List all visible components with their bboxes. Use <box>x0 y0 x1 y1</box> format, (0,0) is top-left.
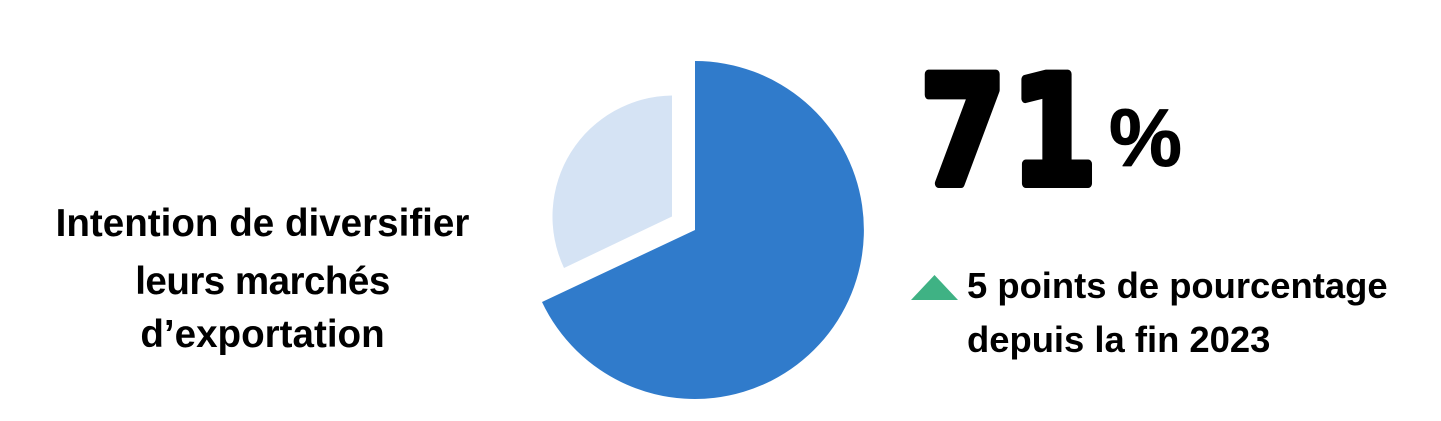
text: change note: depuis la fin 2023 <box>967 319 1270 360</box>
text: change note <box>967 265 1388 360</box>
text: change note: 5 points de pourcentage <box>967 265 1388 306</box>
text: indicator label: d’exportation <box>140 313 385 356</box>
big number: 71 percent <box>920 60 1182 200</box>
text: indicator label: leurs marchés <box>135 260 390 303</box>
pie slice: 71 percent <box>542 61 864 399</box>
pie slice: remainder <box>552 96 672 268</box>
icon: green up triangle <box>911 275 958 300</box>
text: indicator label <box>56 202 469 356</box>
text: indicator label: Intention de diversifier <box>56 202 469 245</box>
percent sign: % <box>1109 93 1182 184</box>
